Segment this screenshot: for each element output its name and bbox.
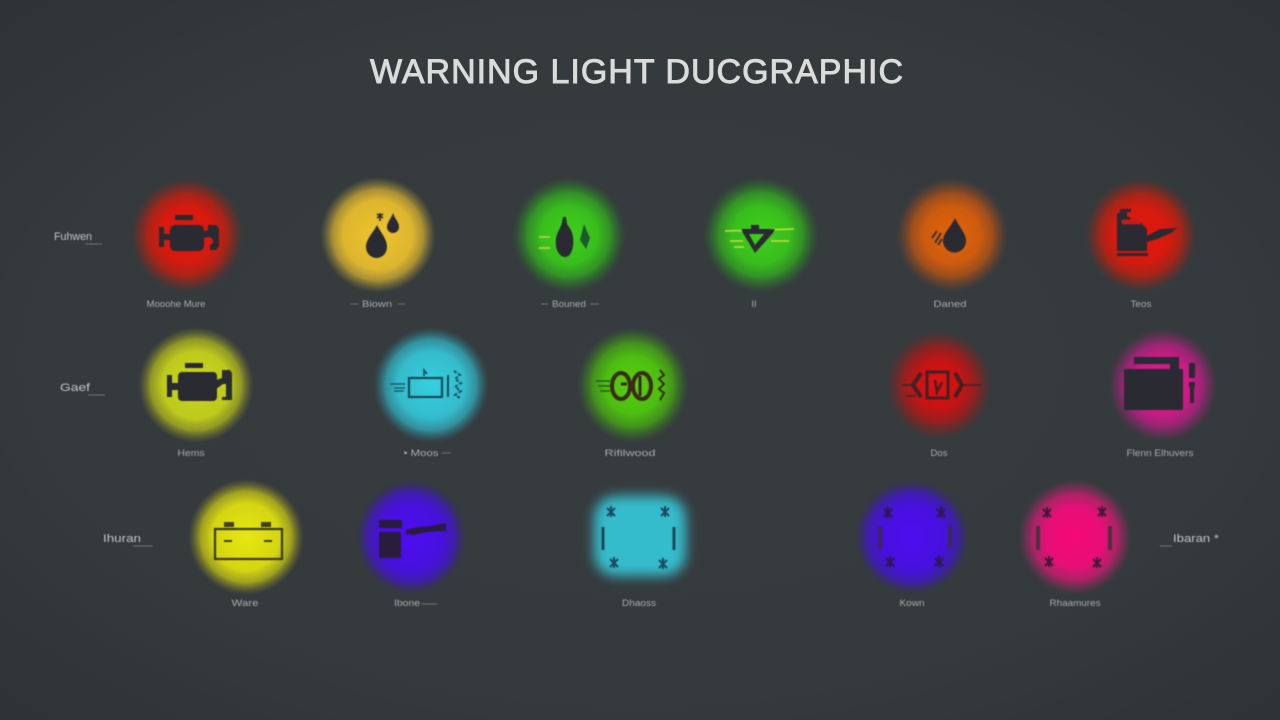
icon: battery bbox=[215, 522, 282, 559]
light: cyan square bbox=[594, 496, 686, 576]
label: Ibone bbox=[394, 598, 437, 609]
light: purple oil can bbox=[355, 479, 467, 595]
label: Daned: Daned bbox=[934, 299, 966, 310]
label: Biown bbox=[350, 299, 405, 310]
icon: engine bbox=[167, 363, 232, 401]
icon: drops bbox=[366, 213, 399, 258]
label: Moos bbox=[404, 448, 451, 459]
label: II: II bbox=[751, 299, 757, 310]
label: Flenn Elhuvers: Flenn Elhuvers bbox=[1126, 448, 1194, 459]
row label: Ihuran bbox=[103, 533, 153, 546]
icon: folder and exclamation bbox=[1124, 357, 1195, 410]
icon: corner marks bbox=[603, 506, 674, 569]
label: Biown: Biown bbox=[362, 299, 392, 310]
label: Rhaamures: Rhaamures bbox=[1050, 598, 1101, 609]
light: pink folder bbox=[1108, 328, 1218, 442]
row label: Fuhwen: Fuhwen bbox=[54, 231, 92, 243]
label: Dos: Dos bbox=[930, 448, 948, 459]
label: Hems: Hems bbox=[178, 448, 205, 459]
icon: filter box bbox=[390, 370, 461, 398]
label: Ibone: Ibone bbox=[394, 598, 420, 609]
row label: Ibaran bbox=[1160, 533, 1220, 546]
light: hot pink round bbox=[1018, 479, 1132, 595]
icon: brake symbol bbox=[902, 372, 981, 398]
light: purple round bbox=[854, 479, 970, 595]
row label: Gaef: Gaef bbox=[60, 382, 91, 394]
light: lime engine bbox=[138, 327, 254, 443]
light: green gear bbox=[577, 327, 689, 443]
icon: corner marks bbox=[880, 507, 950, 567]
icon: oil can bbox=[1117, 209, 1177, 256]
row label: Ihuran: Ihuran bbox=[103, 533, 141, 545]
label: Bouned bbox=[541, 299, 599, 310]
label: Teos: Teos bbox=[1130, 299, 1152, 310]
light: red oil can bbox=[1085, 178, 1197, 292]
icon: triangle bbox=[725, 225, 794, 253]
icon: corner marks bbox=[1038, 506, 1110, 568]
icon: drop with scratches bbox=[932, 218, 966, 252]
label: Kown: Kown bbox=[900, 598, 924, 609]
label: Bouned: Bouned bbox=[552, 299, 586, 310]
light: orange drop bbox=[896, 178, 1008, 292]
label: Moos: • Moos bbox=[404, 448, 439, 459]
title: WARNING LIGHT DUCGRAPHIC bbox=[370, 53, 903, 91]
label: Dhaoss: Dhaoss bbox=[622, 598, 656, 609]
label: Rifilwood: Rifilwood bbox=[604, 448, 656, 459]
icon: green flask and leaf bbox=[539, 217, 590, 257]
light: green triangle bbox=[703, 177, 819, 293]
light: yellow battery bbox=[188, 479, 304, 595]
row label: Ibaran: Ibaran * bbox=[1173, 533, 1220, 545]
label: Ware: Ware bbox=[232, 598, 258, 609]
row label: Gaef bbox=[60, 382, 105, 395]
icon: oil can bbox=[379, 520, 446, 558]
light: green drop bbox=[512, 177, 626, 293]
light: amber oil drops bbox=[320, 177, 436, 293]
icon: gear bbox=[596, 370, 664, 400]
light: red engine bbox=[131, 178, 243, 292]
label: Mooohe Mure: Mooohe Mure bbox=[146, 299, 206, 310]
light: cyan filter bbox=[373, 327, 489, 443]
light: red brake bbox=[886, 330, 992, 440]
icon: engine bbox=[159, 215, 219, 251]
